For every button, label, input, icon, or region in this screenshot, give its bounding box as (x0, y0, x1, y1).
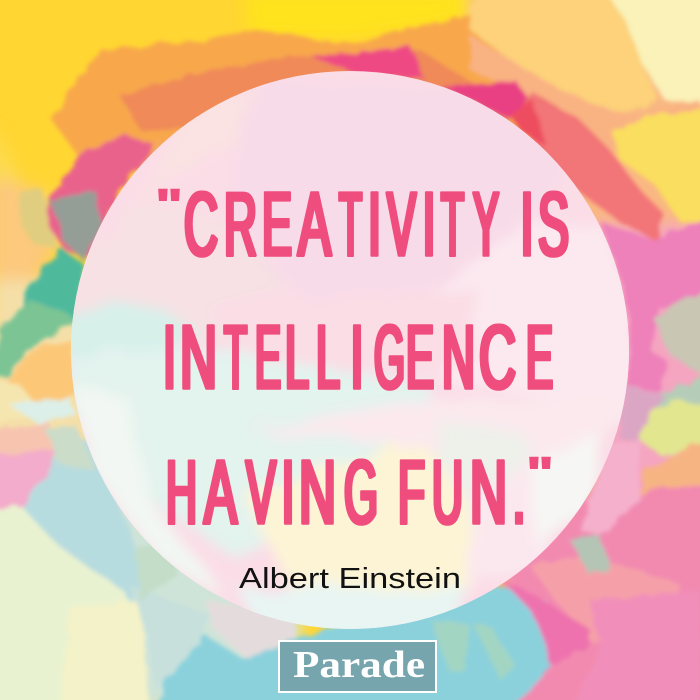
quote line 1: E (262, 175, 292, 275)
quote line 1 (157, 175, 569, 275)
quote line 2: I (163, 308, 176, 408)
quote line 3: . (512, 443, 526, 543)
quote line 2: L (316, 308, 340, 408)
quote line 1: A (298, 175, 331, 275)
quote line 1: T (441, 175, 464, 275)
quote text: E (526, 308, 553, 408)
quote line 3: N (299, 443, 336, 543)
quote line 3: I (282, 443, 294, 543)
quote line 3: " (528, 447, 552, 505)
attribution: Albert Einstein: Albert Einstein (239, 563, 461, 595)
quote line 2: C (479, 308, 516, 408)
quote line 3: V (246, 443, 276, 543)
quote line 1: T (339, 175, 362, 275)
quote line 2: T (224, 308, 247, 408)
quote line 1: I (368, 175, 381, 275)
quote line 1: " (157, 179, 181, 237)
quote line 3: N (470, 443, 507, 543)
quote line 3 (166, 443, 552, 543)
quote line 2 (163, 308, 553, 408)
Parade logo: Parade (293, 644, 425, 686)
quote line 1: Y (473, 175, 499, 275)
quote text (157, 175, 569, 543)
quote line 3: F (398, 443, 425, 543)
quote line 1: V (387, 175, 416, 275)
quote line 3: H (166, 443, 197, 543)
quote line 3: U (432, 443, 463, 543)
quote line 1: R (224, 175, 257, 275)
quote line 2: G (374, 308, 405, 408)
Parade logo (279, 641, 436, 692)
quote line 3: A (204, 443, 237, 543)
quote line 2: L (285, 308, 309, 408)
quote line 1: C (184, 175, 218, 275)
quote line 2: I (350, 308, 364, 408)
quote line 2: E (255, 308, 281, 408)
quote line 1: I (422, 175, 436, 275)
quote line 1: I (520, 175, 534, 275)
translucent white circle (60, 70, 640, 650)
quote line 3: G (344, 443, 378, 543)
quote line 2: E (406, 308, 434, 408)
quote line 2: N (442, 308, 475, 408)
quote line 2: N (180, 308, 217, 408)
quote line 1: S (538, 175, 569, 275)
